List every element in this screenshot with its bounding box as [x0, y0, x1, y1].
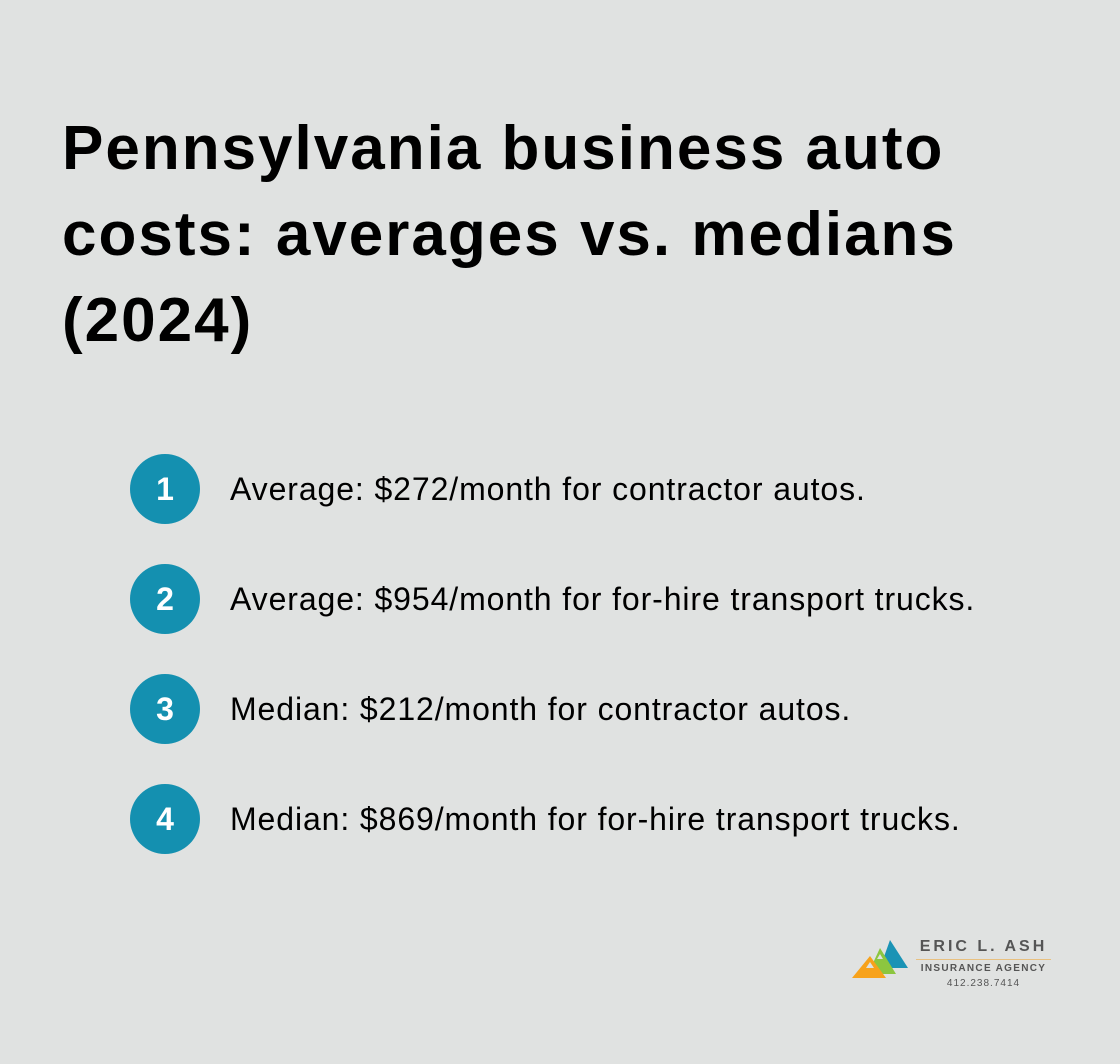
logo text [916, 938, 1051, 989]
badge 4 [130, 784, 200, 854]
title [62, 114, 957, 355]
badge 1: 1 [156, 471, 174, 507]
icon: mountains [852, 940, 908, 978]
item 4: Median: $869/month for for-hire transport trucks. [230, 801, 961, 837]
logo [852, 938, 1051, 989]
item 2: Average: $954/month for for-hire transport trucks. [230, 581, 975, 617]
item 2 [130, 564, 975, 634]
badge 3: 3 [156, 691, 174, 727]
logo text: INSURANCE AGENCY [921, 963, 1046, 974]
item 1: Average: $272/month for contractor autos. [230, 471, 866, 507]
badge 1 [130, 454, 200, 524]
logo text: ERIC L. ASH [920, 938, 1047, 955]
title: costs: averages vs. medians [62, 200, 957, 269]
badge 3 [130, 674, 200, 744]
badge 2 [130, 564, 200, 634]
item 1 [130, 454, 866, 524]
title: Pennsylvania business auto [62, 114, 944, 183]
logo text: 412.238.7414 [947, 978, 1020, 989]
badge 2: 2 [156, 581, 174, 617]
item 4 [130, 784, 961, 854]
badge 4: 4 [156, 801, 174, 837]
item 3: Median: $212/month for contractor autos. [230, 691, 851, 727]
item 3 [130, 674, 851, 744]
title: (2024) [62, 286, 253, 355]
